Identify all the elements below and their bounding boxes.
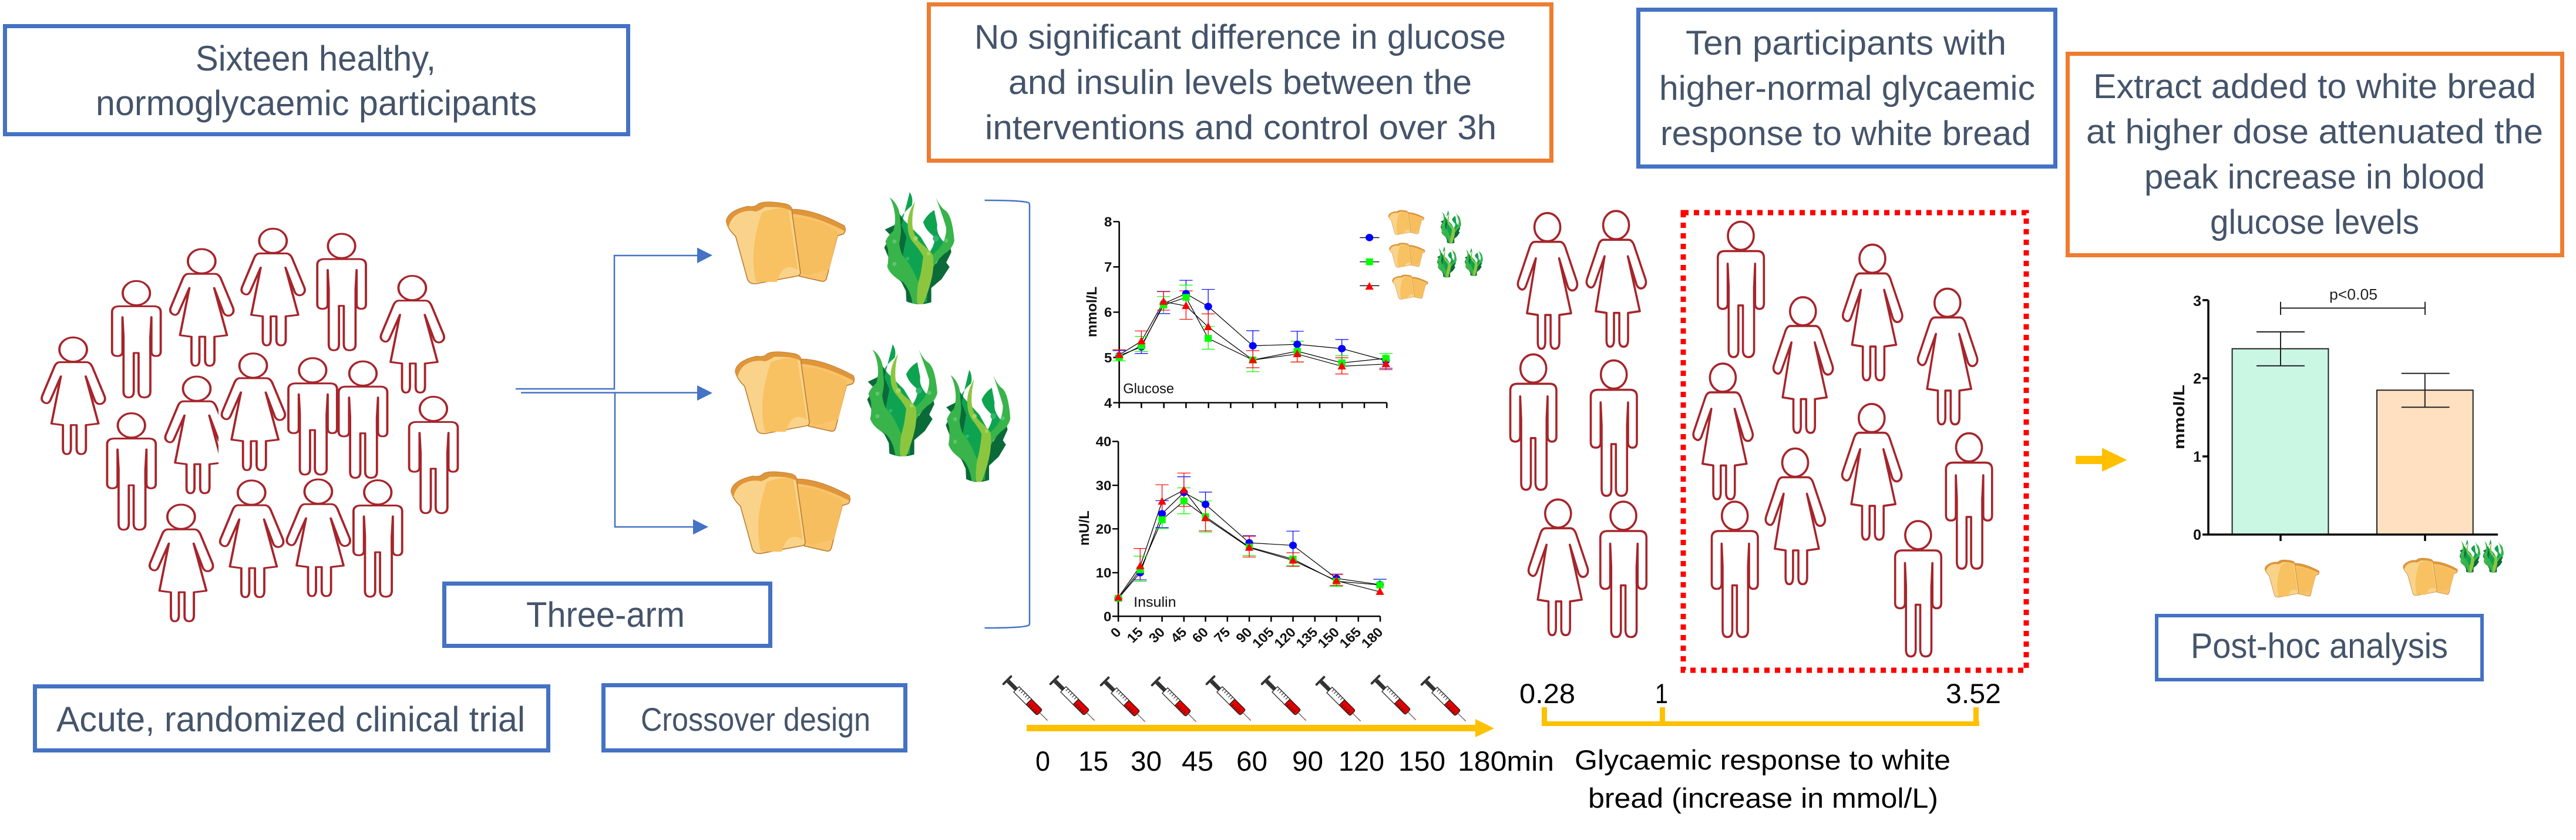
box: acute randomized clinical trial xyxy=(35,686,549,751)
dotted highlight box xyxy=(1683,213,2026,670)
chart: glucose line chart: mmol/L xyxy=(1084,287,1099,337)
chart: insulin line chart: 30 xyxy=(1146,624,1168,646)
box: ten participants xyxy=(1639,9,2056,167)
chart: glucose line chart: Glucose xyxy=(1123,381,1174,397)
chart: insulin line chart: 10 xyxy=(1096,566,1111,580)
chart: glucose line chart: 6 xyxy=(1104,305,1112,320)
box: extract attenuated peak: glucose levels xyxy=(2210,203,2419,241)
box: extract attenuated peak: peak increase in blood xyxy=(2144,158,2485,196)
chart: glucose line chart: 4 xyxy=(1104,395,1112,411)
chart: glucose line chart: 7 xyxy=(1104,260,1112,274)
chart: post-hoc bar chart: 3 xyxy=(2193,293,2201,310)
text: glycaemic response caption xyxy=(1575,744,1951,814)
timeline labels: 90 xyxy=(1292,745,1323,777)
box: crossover design xyxy=(604,685,906,751)
chart: insulin line chart xyxy=(1077,434,1387,651)
box: sixteen healthy participants xyxy=(5,26,628,134)
scale: glycaemic response: 1 xyxy=(1655,678,1668,709)
box: ten participants: higher-normal glycaemic xyxy=(1659,69,2035,107)
box: extract attenuated peak: at higher dose attenuated the xyxy=(2086,113,2543,151)
scale: glycaemic response: 3.52 xyxy=(1946,678,2001,709)
icon: bread control xyxy=(731,472,850,553)
timeline labels: 120 xyxy=(1339,745,1384,777)
icon group: six lower-response participants xyxy=(1511,211,1646,637)
timeline labels: 150 xyxy=(1398,745,1445,777)
timeline labels: 0 xyxy=(1035,745,1050,777)
icons: blood sampling syringes xyxy=(1004,676,1469,725)
box: extract attenuated peak xyxy=(2067,54,2562,255)
scale: glycaemic response xyxy=(1519,678,2001,726)
timeline labels: 30 xyxy=(1131,745,1162,777)
box: no significant difference: and insulin levels between the xyxy=(1008,63,1472,102)
chart: insulin line chart: 60 xyxy=(1189,624,1211,646)
timeline labels: 60 xyxy=(1236,745,1267,777)
chart: insulin line chart: 75 xyxy=(1211,624,1233,646)
chart: insulin line chart: 150 xyxy=(1314,624,1342,651)
box: post-hoc analysis: Post-hoc analysis xyxy=(2191,626,2448,666)
chart: post-hoc bar chart: 0 xyxy=(2193,527,2201,543)
chart: insulin line chart: 135 xyxy=(1293,624,1321,651)
box: no significant difference xyxy=(929,5,1552,161)
timeline labels: 15 xyxy=(1078,745,1108,777)
chart: post-hoc bar chart: p<0.05 xyxy=(2329,285,2377,303)
chart: insulin line chart: 20 xyxy=(1096,522,1111,536)
icon group: ten higher-response participants xyxy=(1693,221,1992,656)
box: ten participants: Ten participants with xyxy=(1686,24,2006,62)
chart: post-hoc bar chart: 2 xyxy=(2193,371,2201,387)
bracket xyxy=(984,200,1030,628)
arrow: timeline xyxy=(1027,719,1494,737)
chart: insulin line chart: 40 xyxy=(1096,434,1111,449)
arrows: three-arm allocation xyxy=(516,248,712,535)
timeline labels: 45 xyxy=(1182,745,1213,777)
box: extract attenuated peak: Extract added to white bread xyxy=(2093,68,2536,106)
box: three-arm: Three-arm xyxy=(526,595,685,634)
chart: glucose line chart: 8 xyxy=(1104,214,1112,229)
chart: glucose line chart: 5 xyxy=(1104,350,1112,365)
chart: post-hoc bar chart: 1 xyxy=(2193,449,2201,465)
arrow: to post-hoc analysis xyxy=(2076,448,2127,472)
text: glycaemic response caption: Glycaemic response to white xyxy=(1575,744,1951,775)
icons: bar chart categories xyxy=(2265,540,2504,597)
chart: insulin line chart: 15 xyxy=(1124,624,1146,646)
chart: insulin line chart: Insulin xyxy=(1134,594,1176,610)
text: glycaemic response caption: bread (increase in mmol/L) xyxy=(1588,782,1938,814)
chart: insulin line chart: 90 xyxy=(1233,624,1255,646)
chart: insulin line chart: 165 xyxy=(1336,624,1364,651)
box: acute randomized clinical trial: Acute, randomized clinical trial xyxy=(56,700,525,739)
timeline labels: 180min xyxy=(1458,745,1554,777)
box: three-arm xyxy=(444,584,771,646)
box: ten participants: response to white bread xyxy=(1660,115,2031,153)
box: no significant difference: No significant difference in glucose xyxy=(974,18,1506,56)
chart: insulin line chart: 120 xyxy=(1271,624,1299,651)
chart: insulin line chart: 0 xyxy=(1104,609,1111,624)
chart: insulin line chart: 105 xyxy=(1249,624,1277,651)
chart: insulin line chart: mU/L xyxy=(1077,510,1092,546)
chart: insulin line chart: 45 xyxy=(1168,624,1190,646)
box: post-hoc analysis xyxy=(2157,616,2482,680)
scale: glycaemic response: 0.28 xyxy=(1519,678,1575,709)
icon: bread with one dose of extract xyxy=(727,192,954,304)
box: crossover design: Crossover design xyxy=(641,701,870,738)
box: no significant difference: interventions and control over 3h xyxy=(985,109,1496,147)
box: sixteen healthy participants: normoglycaemic participants xyxy=(96,83,537,123)
chart: insulin line chart: 30 xyxy=(1096,478,1111,493)
icon group: sixteen participants xyxy=(42,229,458,621)
chart: insulin line chart: 180 xyxy=(1358,624,1386,651)
chart: insulin line chart: 0 xyxy=(1108,624,1124,640)
icon: bread with two doses of extract xyxy=(735,344,1010,482)
chart: post-hoc bar chart xyxy=(2170,285,2498,543)
chart: post-hoc bar chart: mmol/L xyxy=(2170,385,2188,449)
chart legend xyxy=(1360,210,1483,300)
chart: glucose line chart xyxy=(1084,214,1393,411)
timeline labels xyxy=(1035,745,1554,777)
box: sixteen healthy participants: Sixteen healthy, xyxy=(196,39,436,78)
